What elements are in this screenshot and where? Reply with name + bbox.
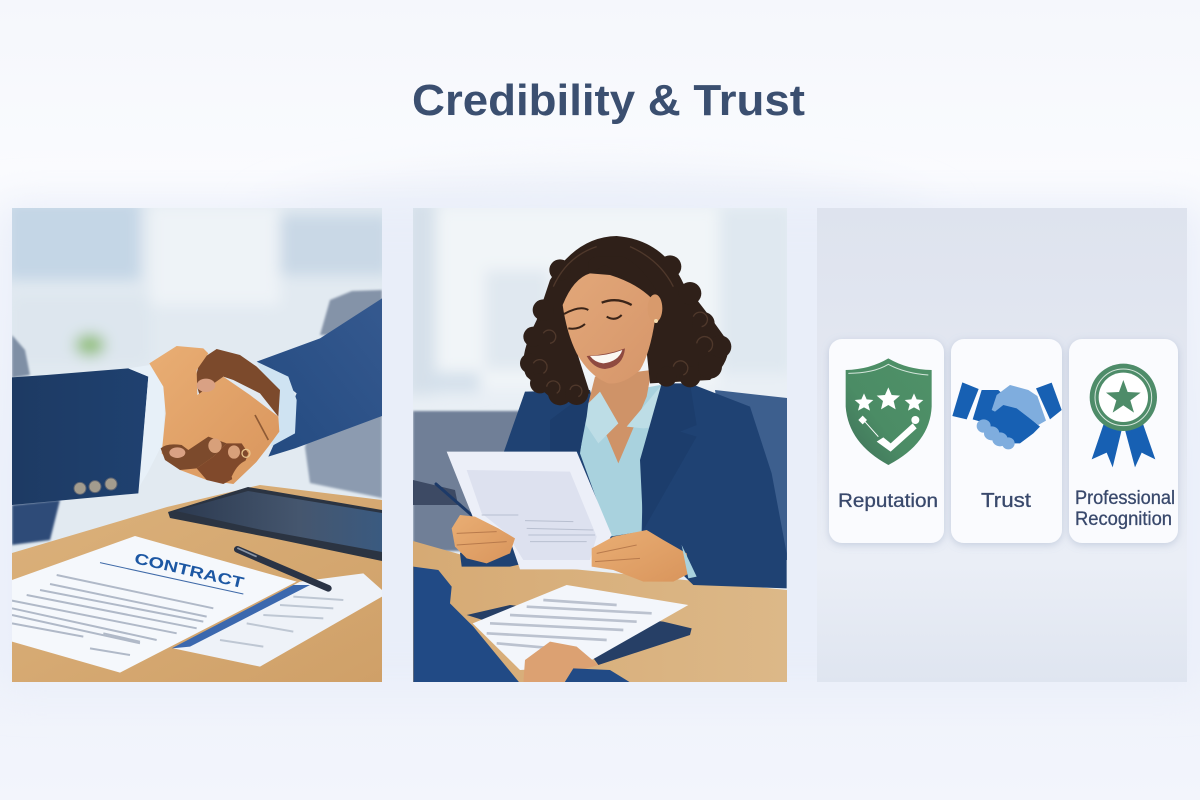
icon: handshake (952, 382, 1062, 449)
card: reputation (829, 339, 944, 543)
shirt (580, 385, 665, 537)
chair (715, 390, 787, 560)
lower document and folder (467, 585, 692, 670)
panel: credibility badges (817, 208, 1187, 682)
tablet (168, 487, 382, 561)
jacket (460, 383, 787, 588)
icon: award ribbon (1090, 364, 1157, 467)
desk (413, 541, 787, 682)
contract documents (12, 536, 382, 673)
title: Credibility & Trust (412, 76, 805, 125)
panel: woman reviewing document (405, 200, 792, 683)
desk (12, 485, 382, 682)
woman figure (436, 236, 787, 588)
held paper (447, 452, 612, 569)
hair curls (533, 247, 713, 397)
right sleeve (257, 298, 382, 457)
office window background (413, 208, 787, 553)
panel: handshake over contract (5, 200, 390, 682)
neck (587, 370, 652, 463)
main sheet (12, 536, 297, 673)
collar and lapels (585, 392, 618, 443)
pen (436, 484, 473, 516)
icon: shield with stars and check (846, 358, 932, 465)
face (563, 273, 655, 383)
clasped hands (149, 346, 280, 484)
chairs (12, 290, 382, 545)
left sleeve (12, 368, 148, 505)
label: reputation: Reputation (838, 490, 938, 512)
card: trust (951, 339, 1062, 543)
foreground person (413, 567, 632, 683)
office background (12, 208, 382, 552)
contract heading: CONTRACT (133, 550, 246, 592)
hands (452, 515, 515, 563)
pen (237, 548, 328, 588)
label: trust: Trust (981, 490, 1031, 512)
card: professional recognition (1069, 339, 1178, 543)
hair back (520, 236, 731, 405)
second sheet (173, 573, 382, 667)
label: professional recognition: Recognition (1075, 509, 1172, 530)
label: professional recognition: Professional (1075, 488, 1175, 509)
